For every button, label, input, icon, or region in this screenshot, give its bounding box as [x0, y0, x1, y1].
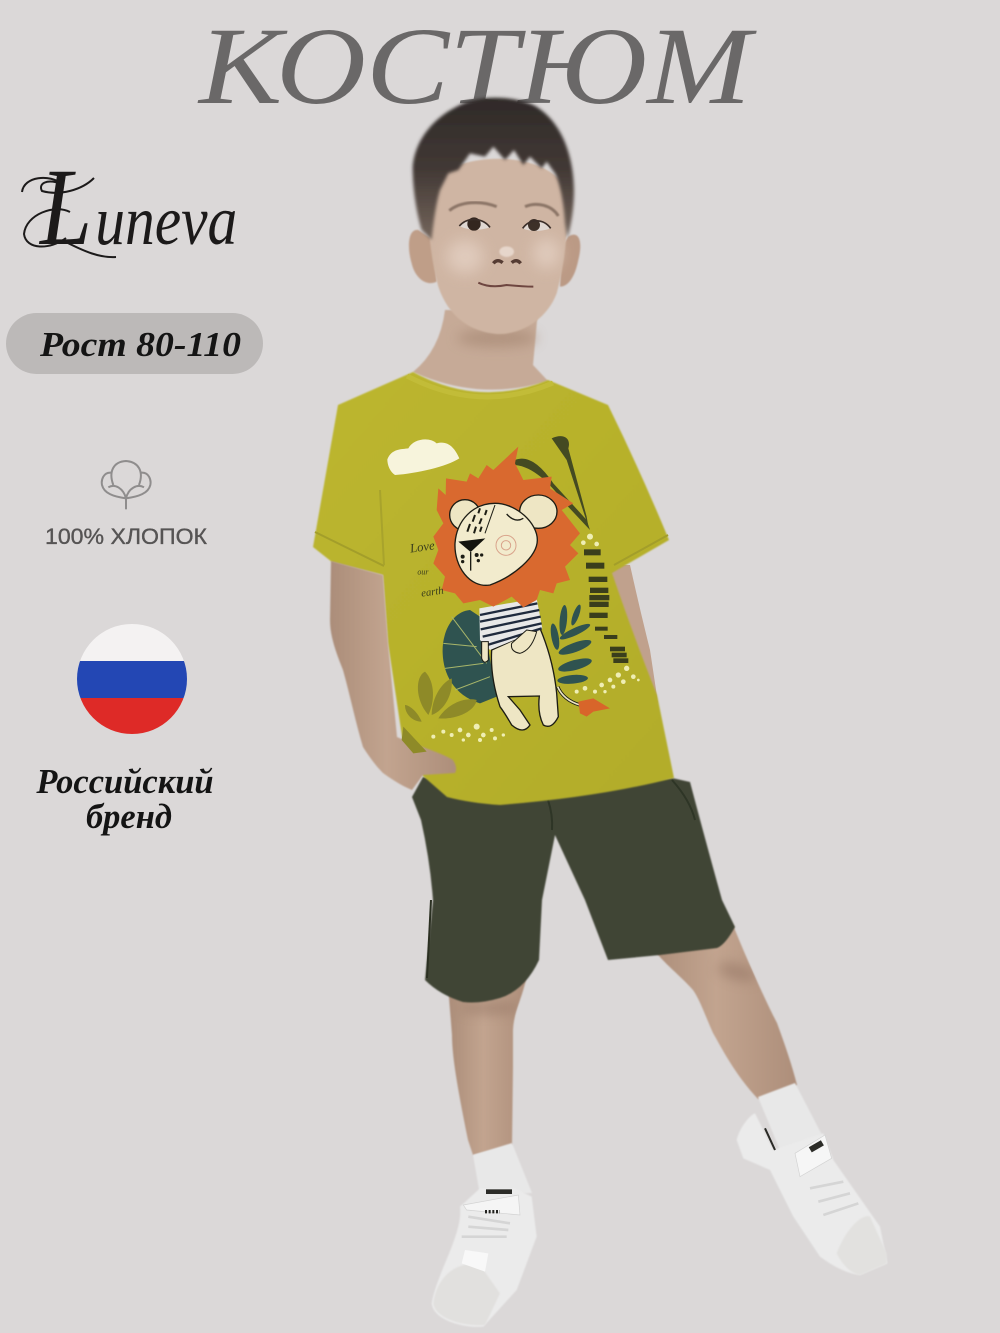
lion ears [450, 500, 480, 530]
right sneaker [737, 1113, 887, 1275]
print slogan: our [417, 568, 429, 577]
t-shirt [313, 372, 674, 805]
neck shadow [457, 329, 537, 347]
icon: cotton [102, 461, 151, 509]
boy photo illustration [313, 98, 887, 1327]
lion arm [482, 642, 488, 662]
eyebrows [449, 203, 558, 216]
print slogan: Love [408, 538, 436, 556]
shorts [412, 777, 735, 1002]
icon: russian flag [77, 624, 187, 735]
hair [413, 98, 574, 240]
fern [549, 604, 593, 685]
striped sweater [479, 598, 542, 650]
cloud [387, 439, 459, 475]
ears [409, 230, 437, 283]
lion tail [558, 687, 580, 705]
right leg [650, 925, 797, 1099]
print slogan: earth [421, 586, 444, 600]
face [425, 159, 567, 334]
mouth [478, 283, 533, 287]
dots [431, 534, 640, 742]
eyes [459, 217, 551, 231]
lion features [458, 505, 523, 571]
left arm with hand [330, 561, 456, 790]
brand origin text: Российский [35, 763, 214, 801]
nose [493, 261, 521, 263]
lion face [455, 503, 537, 585]
lion mane [433, 447, 580, 607]
brand logo: L [38, 147, 92, 269]
neck [413, 310, 548, 390]
t-shirt print: lion [387, 436, 640, 753]
white socks [473, 1083, 822, 1195]
brand logo [22, 147, 237, 269]
brand origin text: бренд [86, 798, 172, 836]
height pill: Рост 80-110 [39, 325, 241, 364]
palm and stripes [515, 436, 628, 663]
left sneaker [432, 1188, 537, 1327]
left leg [448, 975, 527, 1155]
lion body [491, 628, 558, 730]
title: КОСТЮМ [197, 5, 757, 127]
height pill [6, 313, 263, 374]
right arm [608, 565, 658, 703]
cotton label: 100% ХЛОПОК [45, 524, 207, 549]
cheek highlights [447, 238, 560, 273]
knee shadows [460, 959, 758, 1014]
print slogan [408, 538, 444, 600]
small leaves [402, 672, 477, 753]
head [409, 98, 580, 334]
monstera leaf [443, 610, 497, 703]
brand logo: uneva [95, 183, 237, 260]
